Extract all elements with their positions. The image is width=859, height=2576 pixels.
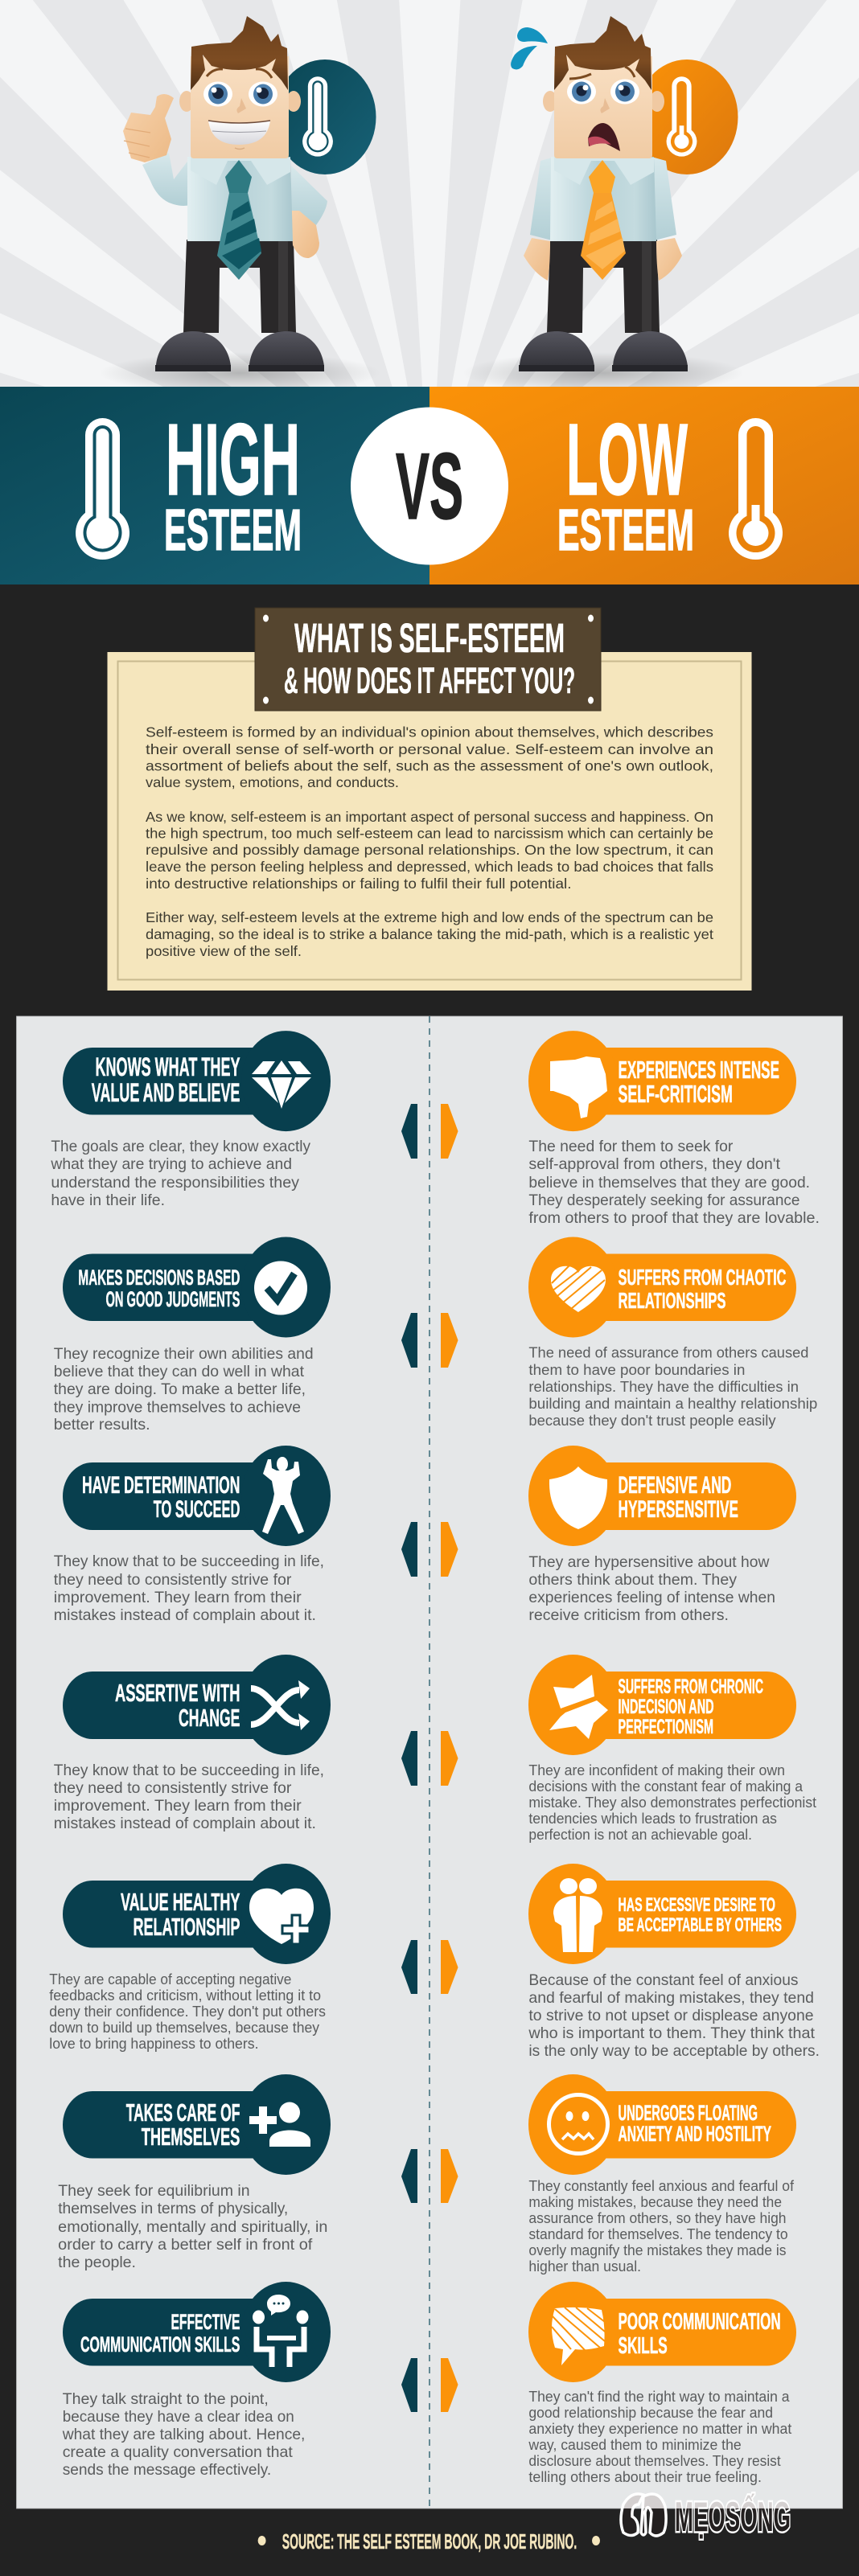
heading — [618, 1056, 779, 1108]
intro text: repulsive and possibly damage personal relationships. On the low spectrum, it can — [146, 842, 713, 858]
heading board: WHAT IS SELF-ESTEEM — [294, 615, 565, 661]
text: receive criticism from others. — [528, 1606, 729, 1624]
text: believe that they can do well in what — [54, 1363, 305, 1380]
text: better results. — [54, 1416, 150, 1434]
intro text: into destructive relationships or failing to fulfil their full potential. — [146, 876, 571, 892]
text: The goals are clear, they know exactly — [51, 1138, 310, 1155]
heading: RELATIONSHIPS — [618, 1288, 725, 1313]
heading — [618, 1265, 787, 1313]
icon: scribbled speech bubble — [552, 2307, 605, 2365]
text: good relationship because the fear and — [528, 2404, 773, 2421]
text: mistakes instead of complain about it. — [54, 1606, 316, 1624]
text: them to have poor boundaries in — [528, 1361, 745, 1378]
text: they are doing. To make a better life, — [54, 1380, 306, 1398]
text: They constantly feel anxious and fearful of — [528, 2177, 795, 2194]
text: telling others about their true feeling. — [528, 2468, 762, 2485]
text: from others to proof that they are lovable. — [528, 1209, 820, 1227]
text: experiences feeling of intense when — [528, 1589, 775, 1606]
arrows row 3 — [401, 1522, 458, 1577]
text — [49, 1971, 326, 2052]
arrows row 2 — [401, 1313, 458, 1368]
intro text: assortment of beliefs about the self, such as the assessment of one's own outlook, — [146, 758, 713, 774]
heading: HAVE DETERMINATION — [82, 1472, 240, 1499]
heading: ON GOOD JUDGMENTS — [106, 1287, 240, 1311]
heading: KNOWS WHAT THEY — [95, 1052, 240, 1081]
heading: ASSERTIVE WITH — [115, 1679, 240, 1707]
text: making mistakes, because they need the — [528, 2193, 782, 2210]
intro text — [146, 724, 713, 959]
text: relationships. They have the difficulties in — [528, 1378, 799, 1395]
text: they need to consistently strive for — [54, 1571, 292, 1589]
text: anxiety they experience no matter in what — [528, 2420, 791, 2437]
text: Because of the constant feel of anxious — [528, 1971, 799, 1989]
text: building and maintain a healthy relationship — [528, 1395, 817, 1412]
heading: HYPERSENSITIVE — [618, 1496, 738, 1523]
VS badge: VS — [396, 433, 463, 539]
icon: check mark — [254, 1261, 307, 1315]
heading — [618, 2101, 771, 2146]
heading — [618, 1472, 738, 1523]
icon: thumbs down — [550, 1056, 607, 1118]
character: worried man with low self-esteem — [462, 16, 744, 394]
text: is the only way to be acceptable by others. — [528, 2042, 820, 2060]
icon: teal thermometer badge — [273, 59, 376, 174]
text: standard for themselves. The tendency to — [528, 2225, 788, 2242]
text — [54, 1762, 324, 1832]
text: to strive to not upset or displease anyone — [528, 2007, 814, 2024]
text — [58, 2182, 327, 2271]
text: who is important to them. They think that — [528, 2024, 816, 2042]
heading: INDECISION AND — [618, 1696, 714, 1718]
text: understand the responsibilities they — [51, 1174, 299, 1192]
sunburst background — [0, 0, 859, 387]
intro text: their overall sense of self-worth or personal value. Self-esteem can involve an — [146, 741, 713, 757]
arrows row 5 — [401, 1940, 458, 1994]
text: The need for them to seek for — [528, 1138, 734, 1155]
icon: strong man — [262, 1457, 304, 1534]
heading — [618, 1676, 763, 1738]
row 5 low: desire to be acceptable — [528, 1864, 820, 2060]
text: They desperately seeking for assurance — [528, 1192, 799, 1209]
text: mistake. They also demonstrates perfectionist — [528, 1794, 816, 1811]
heading: EFFECTIVE — [171, 2310, 240, 2334]
heading: ESTEEM: ESTEEM — [164, 498, 302, 563]
arrows row 6 — [401, 2149, 458, 2203]
text: what they are talking about. Hence, — [62, 2426, 305, 2443]
text — [528, 1971, 820, 2060]
text: deny their confidence. They don't put others — [49, 2003, 326, 2020]
heading: HIGH: HIGH — [166, 403, 300, 516]
text: because they don't trust people easily — [528, 1412, 776, 1429]
text: feedbacks and criticism, without letting it to — [49, 1987, 321, 2004]
text: self-approval from others, they don't — [528, 1155, 781, 1173]
text: order to carry a better self in front of — [58, 2236, 313, 2254]
heading board — [255, 608, 601, 711]
text: have in their life. — [51, 1192, 165, 1209]
text: decisions with the constant fear of making a — [528, 1778, 804, 1795]
text: The need of assurance from others caused — [528, 1344, 808, 1361]
intro text: Either way, self-esteem levels at the extreme high and low ends of the spectrum can be — [146, 909, 713, 925]
icon: sweat drops — [511, 27, 548, 69]
text: They can't find the right way to maintain a — [528, 2388, 790, 2405]
intro text: positive view of the self. — [146, 943, 302, 959]
text: love to bring happiness to others. — [49, 2035, 259, 2052]
text — [62, 2390, 305, 2479]
heading: VALUE HEALTHY — [121, 1888, 240, 1916]
intro text: leave the person feeling helpless and depressed, which leads to bad choices that falls — [146, 859, 713, 875]
text: create a quality conversation that — [63, 2443, 293, 2461]
heading: ESTEEM: ESTEEM — [557, 498, 694, 563]
text — [528, 1553, 775, 1624]
text: They seek for equilibrium in — [58, 2182, 250, 2200]
heading: VALUE AND BELIEVE — [92, 1078, 240, 1107]
heading: TO SUCCEED — [154, 1496, 240, 1523]
text: higher than usual. — [528, 2258, 641, 2275]
text: They talk straight to the point, — [63, 2390, 269, 2408]
heading: LOW: LOW — [566, 403, 688, 516]
heading — [618, 1894, 782, 1936]
row 1 low: self-criticism — [528, 1031, 820, 1227]
icon: add person — [249, 2102, 310, 2147]
text: They know that to be succeeding in life, — [54, 1553, 324, 1570]
text: way, caused them to minimize the — [528, 2436, 742, 2453]
heading: SELF-CRITICISM — [618, 1080, 733, 1108]
heading — [618, 2309, 781, 2359]
heading — [126, 2098, 240, 2151]
text: believe in themselves that they are good. — [528, 1174, 810, 1192]
row 2 high: good judgments — [54, 1237, 331, 1434]
text: emotionally, mentally and spiritually, in — [58, 2218, 327, 2236]
heading — [80, 2310, 240, 2357]
row 1 high: knows what they value — [50, 1031, 331, 1209]
text: disclosure about themselves. They resist — [528, 2452, 781, 2469]
text: They know that to be succeeding in life, — [54, 1762, 324, 1779]
text: They are inconfident of making their own — [528, 1762, 785, 1778]
icon: diamond — [252, 1060, 311, 1109]
text: themselves in terms of physically, — [58, 2200, 288, 2217]
text — [528, 1762, 816, 1843]
heading — [115, 1679, 240, 1732]
icon: high thermometer — [76, 418, 129, 560]
text: down to build up themselves, because they — [49, 2019, 320, 2036]
text: They are capable of accepting negative — [49, 1971, 291, 1987]
heading: THEMSELVES — [142, 2123, 240, 2151]
icon: anxious face — [549, 2095, 608, 2153]
icon: low thermometer — [729, 418, 783, 560]
row 6 high: takes care of themselves — [58, 2074, 331, 2271]
heading board: & HOW DOES IT AFFECT YOU? — [284, 660, 575, 701]
row 2 low: chaotic relationships — [528, 1237, 817, 1429]
row 4 high: assertive with change — [54, 1655, 331, 1832]
heading — [78, 1265, 240, 1311]
text: improvement. They learn from their — [54, 1797, 302, 1815]
text — [54, 1553, 324, 1624]
intro text: the high spectrum, too much self-esteem can lead to narcissism which can certainly be — [146, 825, 713, 841]
arrows row 1 — [401, 1104, 458, 1159]
source line — [258, 2529, 600, 2553]
text: tendencies which leads to frustration as — [528, 1810, 777, 1827]
row 3 low: defensive — [528, 1446, 796, 1624]
icon: two people — [553, 1878, 602, 1952]
text: mistakes instead of complain about it. — [54, 1815, 316, 1832]
text: they need to consistently strive for — [54, 1779, 292, 1797]
text: because they have a clear idea on — [63, 2408, 294, 2426]
text: and fearful of making mistakes, they tend — [528, 1989, 814, 2007]
text — [528, 2177, 795, 2275]
text: the people. — [58, 2254, 136, 2271]
panel: what is self-esteem — [108, 608, 751, 991]
text — [528, 1138, 820, 1227]
icon: shuffle arrows — [251, 1680, 310, 1730]
text: what they are trying to achieve and — [50, 1155, 292, 1173]
character: confident man with high self-esteem — [99, 16, 380, 394]
row 4 low: chronic indecision — [528, 1655, 816, 1843]
text: They recognize their own abilities and — [54, 1345, 314, 1363]
text — [54, 1345, 314, 1434]
thumbs up hand — [123, 94, 174, 162]
VS badge — [351, 407, 508, 564]
text — [50, 1138, 310, 1209]
row 5 high: healthy relationship — [49, 1864, 331, 2052]
intro text: damaging, so the ideal is to strike a balance taking the mid-path, which is a realistic yet — [146, 926, 713, 942]
icon: scribbled heart — [551, 1265, 606, 1312]
banner: low esteem — [430, 387, 859, 585]
text — [528, 2388, 791, 2485]
arrows row 4 — [401, 1731, 458, 1786]
text: they improve themselves to achieve — [54, 1398, 301, 1416]
heading: MAKES DECISIONS BASED — [78, 1265, 240, 1290]
text: sends the message effectively. — [63, 2461, 271, 2479]
text: They are hypersensitive about how — [528, 1553, 770, 1571]
text: perfection is not an achievable goal. — [528, 1826, 752, 1843]
heading: RELATIONSHIP — [134, 1913, 240, 1941]
icon: orange thermometer badge — [635, 59, 738, 174]
text: overly magnify the mistakes they made is — [528, 2242, 787, 2258]
icon: broken star — [549, 1675, 608, 1739]
text: others think about them. They — [528, 1571, 737, 1589]
panel: comparison — [16, 1016, 843, 2508]
intro text: value system, emotions, and conducts. — [146, 774, 399, 790]
heading: DEFENSIVE AND — [618, 1472, 731, 1499]
heading: PERFECTIONISM — [618, 1716, 713, 1738]
intro text: Self-esteem is formed by an individual's opinion about themselves, which describes — [146, 724, 713, 740]
heading — [82, 1472, 240, 1523]
text — [528, 1344, 817, 1429]
heading: COMMUNICATION SKILLS — [80, 2332, 240, 2357]
logo: meo song — [621, 2493, 791, 2541]
heading: CHANGE — [179, 1704, 240, 1732]
source line: SOURCE: THE SELF ESTEEM BOOK, DR JOE RUBINO. — [282, 2529, 577, 2553]
heading: SKILLS — [618, 2333, 668, 2359]
heading: TAKES CARE OF — [126, 2098, 240, 2127]
row 7 low: poor communication — [528, 2282, 796, 2485]
row 6 low: floating anxiety — [528, 2074, 796, 2275]
banner: high esteem — [0, 387, 430, 585]
icon: two people talking at table — [253, 2295, 309, 2367]
intro text: As we know, self-esteem is an important aspect of personal success and happiness. On — [146, 809, 713, 825]
icon: heart with plus — [249, 1889, 314, 1944]
heading — [92, 1052, 240, 1107]
row 7 high: effective communication — [62, 2282, 331, 2479]
text: assurance from others, so they have high — [528, 2209, 787, 2226]
text: improvement. They learn from their — [54, 1589, 302, 1606]
icon: shield — [549, 1466, 607, 1529]
heading — [121, 1888, 240, 1941]
row 3 high: determination — [54, 1446, 331, 1624]
arrows row 7 — [401, 2358, 458, 2412]
